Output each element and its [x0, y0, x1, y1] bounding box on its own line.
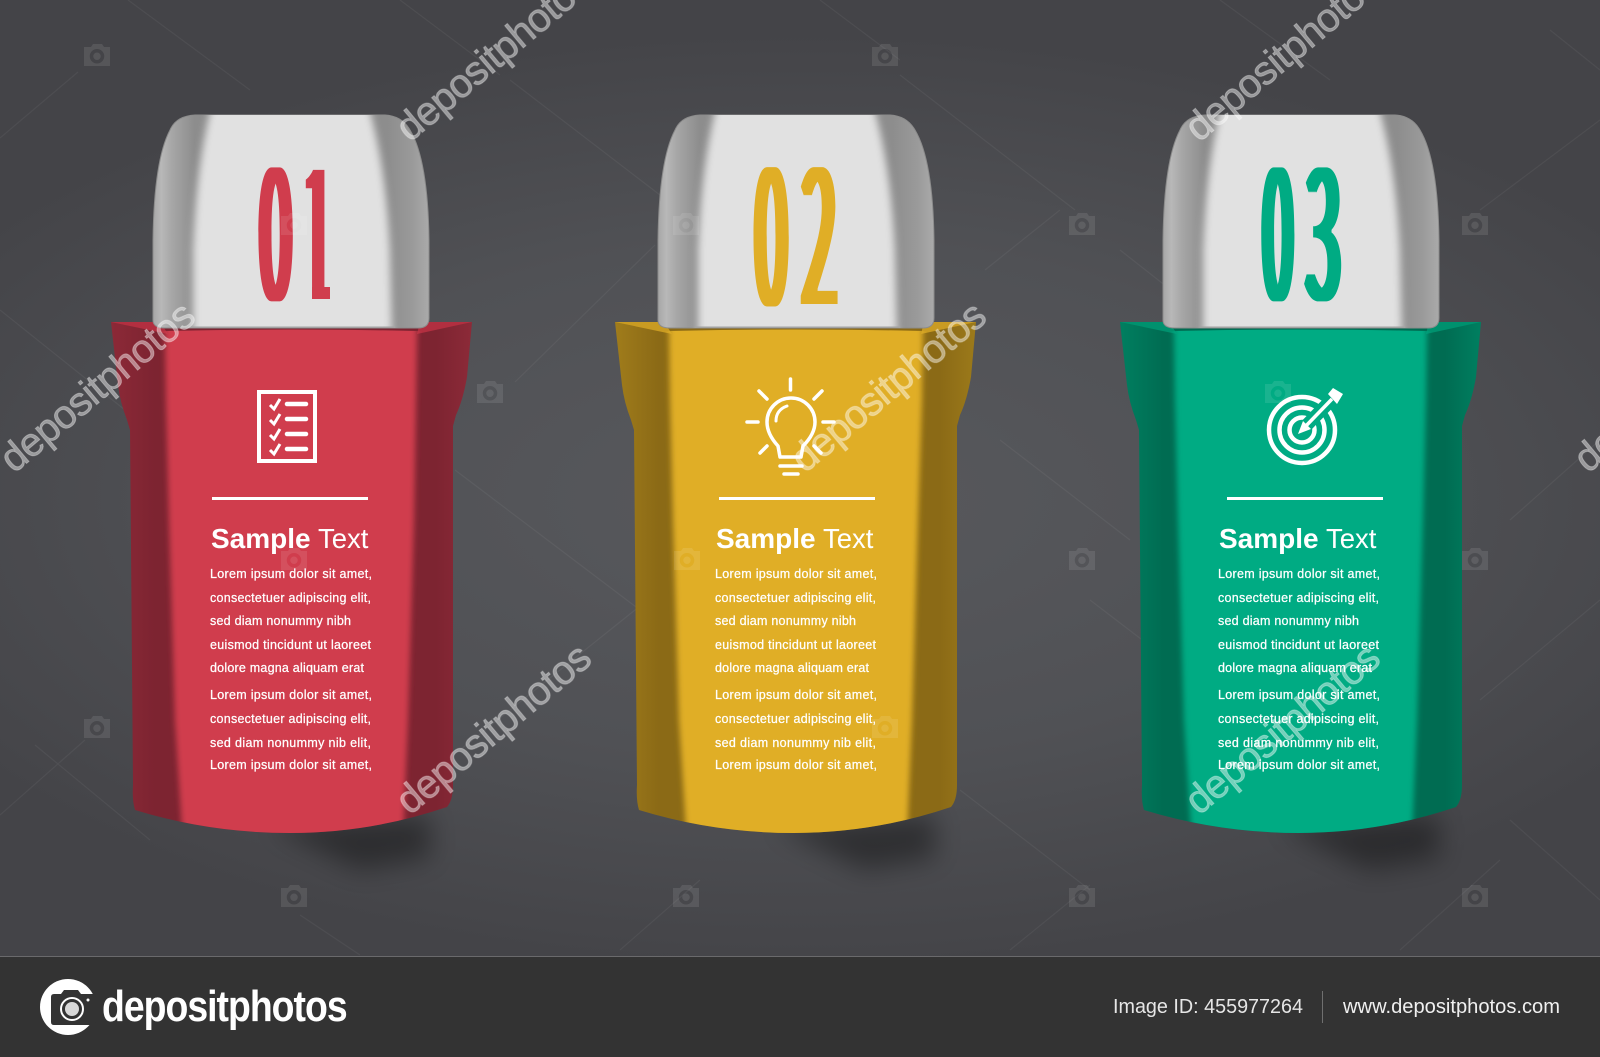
number 01: 0	[260, 88, 292, 354]
text block: body copy: Lorem ipsum dolor sit amet,	[1218, 567, 1380, 581]
icon: target with dart	[1269, 386, 1345, 463]
text block: body copy: sed diam nonummy nibh	[715, 614, 856, 628]
text block: body copy: consectetuer adipiscing elit,	[1218, 591, 1379, 605]
text block: body copy: Lorem ipsum dolor sit amet,	[715, 567, 877, 581]
heading: Sample Text: Text	[1326, 523, 1377, 554]
text block: body copy: Lorem ipsum dolor sit amet,	[210, 567, 372, 581]
shadow: card 1	[270, 815, 430, 870]
text block: body copy: Lorem ipsum dolor sit amet,	[210, 758, 372, 772]
watermark cameras	[84, 44, 1488, 907]
logo icon: camera in circle	[40, 979, 96, 1035]
footer bar	[0, 956, 1600, 1057]
text block: body copy: consectetuer adipiscing elit,	[1218, 712, 1379, 726]
text block: body copy: Lorem ipsum dolor sit amet,	[1218, 758, 1380, 772]
text block: body copy: Lorem ipsum dolor sit amet,	[715, 688, 877, 702]
text block: body copy: euismod tincidunt ut laoreet	[1218, 638, 1380, 652]
icon: checklist	[259, 392, 315, 461]
text block: body copy: Lorem ipsum dolor sit amet,	[210, 688, 372, 702]
text block: body copy: dolore magna aliquam erat	[1218, 661, 1373, 675]
panel: card 02 yellow	[615, 83, 976, 860]
card 02 number tab	[658, 112, 934, 332]
watermark text	[0, 0, 1600, 823]
text block: body copy: euismod tincidunt ut laoreet	[210, 638, 372, 652]
number 02	[754, 83, 837, 360]
card 03 number tab	[1163, 112, 1439, 332]
watermark text: depositphotos	[1177, 635, 1389, 823]
text block: body copy: sed diam nonummy nib elit,	[1218, 736, 1379, 750]
logo wordmark: depositphotos	[102, 981, 348, 1031]
text block: body copy	[715, 567, 877, 772]
text block: body copy: consectetuer adipiscing elit,	[210, 712, 371, 726]
text block: body copy: consectetuer adipiscing elit,	[715, 591, 876, 605]
number 01: 1	[304, 86, 331, 353]
watermark text: depositphotos	[783, 293, 995, 481]
text block: body copy: sed diam nonummy nib elit,	[715, 736, 876, 750]
icon: light bulb	[747, 379, 834, 474]
heading: Sample Text: Sample	[211, 523, 311, 554]
image id: Image ID: 455977264	[1113, 996, 1303, 1018]
heading: Sample Text: Text	[318, 523, 369, 554]
card 03 body	[1120, 322, 1481, 860]
card 01 body	[111, 322, 472, 860]
shadow: card 3	[1279, 815, 1439, 870]
text block: body copy: dolore magna aliquam erat	[715, 661, 870, 675]
text block: body copy: Lorem ipsum dolor sit amet,	[715, 758, 877, 772]
text block: body copy: consectetuer adipiscing elit,	[715, 712, 876, 726]
panel: card 03 green	[1120, 87, 1481, 860]
number 03: 3	[1306, 87, 1341, 354]
card 02 body	[615, 322, 976, 860]
card 01 number tab	[153, 112, 429, 332]
text block: body copy: sed diam nonummy nibh	[1218, 614, 1359, 628]
shadow: card 2	[775, 815, 935, 870]
number 01	[258, 167, 330, 302]
heading: Sample Text: Text	[823, 523, 874, 554]
text block: body copy: Lorem ipsum dolor sit amet,	[1218, 688, 1380, 702]
text block: body copy	[1218, 567, 1380, 772]
text block: body copy: euismod tincidunt ut laoreet	[715, 638, 877, 652]
number 02: 0	[754, 84, 788, 360]
text block: body copy: consectetuer adipiscing elit,	[210, 591, 371, 605]
heading: Sample Text: Sample	[716, 523, 816, 554]
text block: body copy: sed diam nonummy nib elit,	[210, 736, 371, 750]
watermark text: depositphotos	[388, 635, 600, 823]
text block: body copy	[210, 567, 372, 772]
panel: card 01 red	[111, 86, 472, 860]
website url: www.depositphotos.com	[1342, 996, 1560, 1018]
number 03: 0	[1262, 87, 1293, 354]
text block: body copy: dolore magna aliquam erat	[210, 661, 365, 675]
heading: Sample Text: Sample	[1219, 523, 1319, 554]
number 02: 2	[802, 83, 837, 360]
number 03	[1262, 87, 1341, 354]
text block: body copy: sed diam nonummy nibh	[210, 614, 351, 628]
